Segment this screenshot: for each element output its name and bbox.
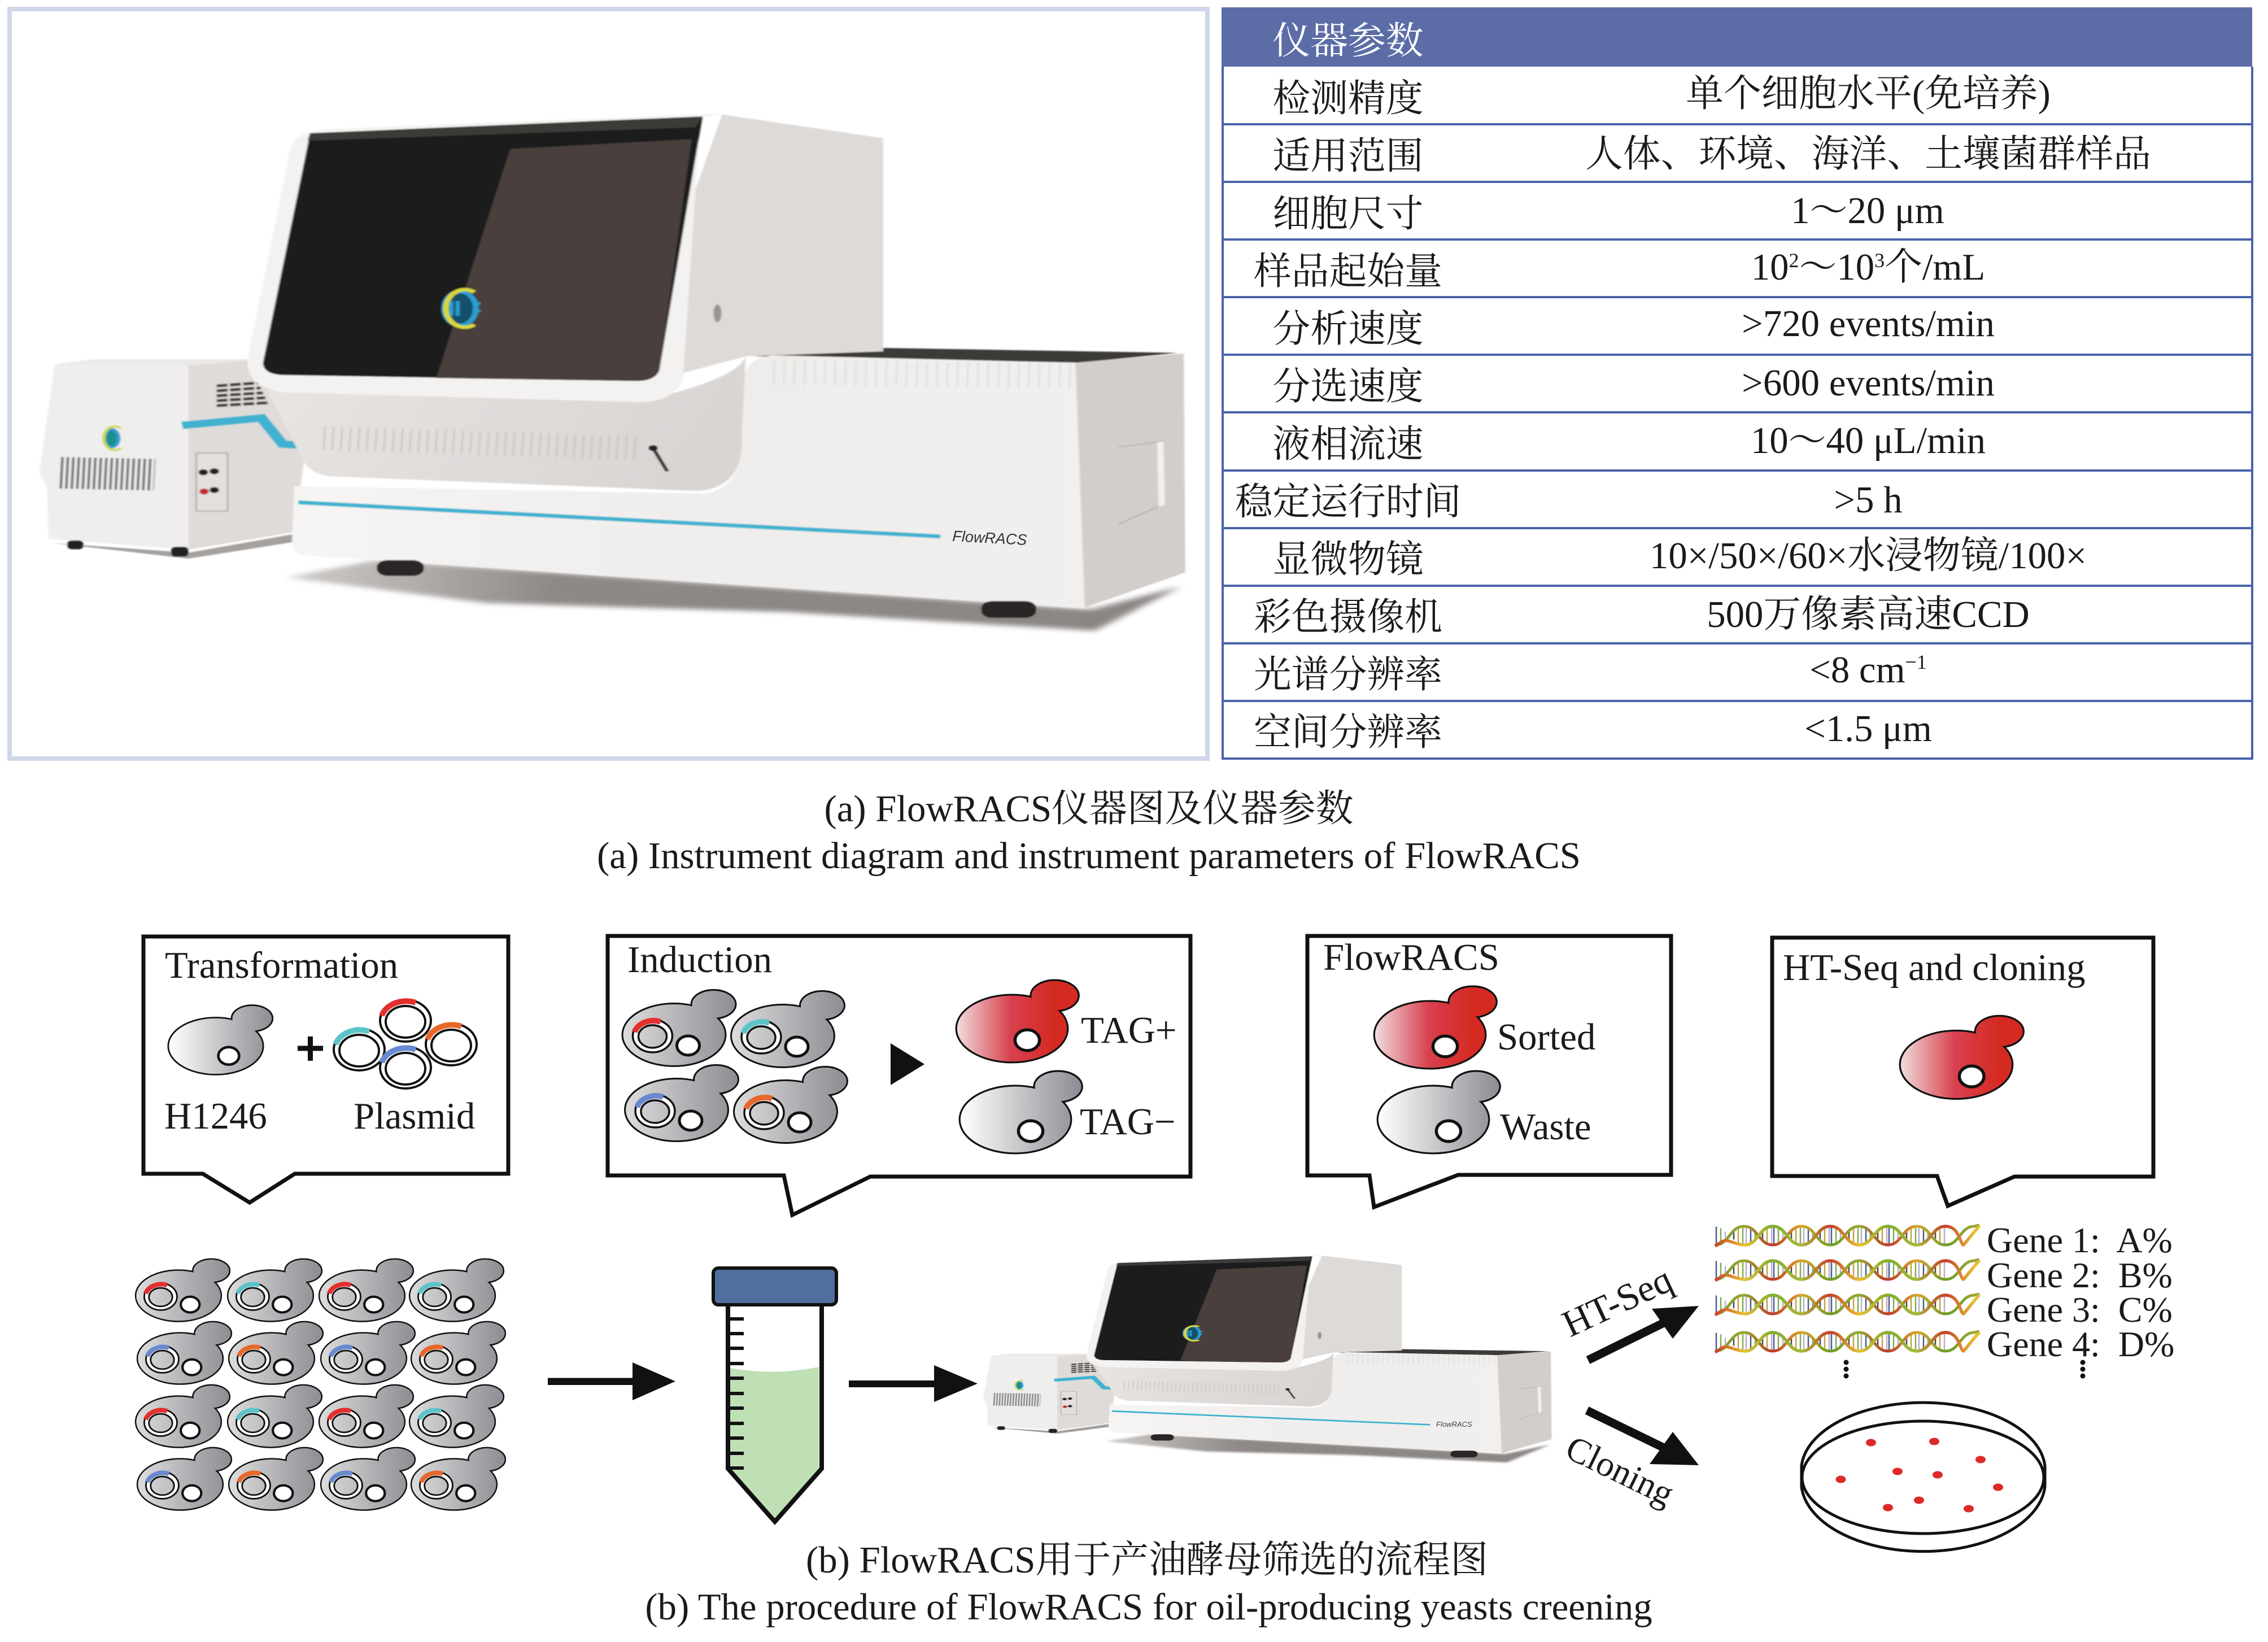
row: sample starting amount: 个/mL bbox=[1885, 246, 1985, 288]
caption b, Chinese: (b) FlowRACS用于产油酵母筛选的流程图 bbox=[806, 1539, 1488, 1581]
row: stable run time bbox=[1235, 479, 1903, 523]
row: sample starting amount: 2 bbox=[1789, 249, 1799, 272]
panel: instrument parameters table bbox=[1222, 7, 2253, 759]
table header bar: 仪器参数 bbox=[1272, 20, 1424, 62]
row: microscope objective: 显微物镜 bbox=[1272, 539, 1424, 581]
row: liquid flow rate bbox=[1272, 420, 1986, 465]
label: Cloning: Cloning bbox=[1560, 1428, 1680, 1514]
label: Waste: Waste bbox=[1500, 1106, 1591, 1148]
icon: sorted red yeast bbox=[1375, 987, 1496, 1068]
row: sample starting amount: ～10 bbox=[1799, 246, 1874, 288]
arrow head: Cloning bbox=[1650, 1432, 1699, 1465]
row: detection precision: 单个细胞水平(免培养) bbox=[1686, 73, 2051, 115]
heading: Transformation: Transformation bbox=[165, 944, 398, 986]
row: analysis speed: 分析速度 bbox=[1272, 308, 1424, 350]
row: spatial resolution: <1.5 μm bbox=[1804, 708, 1932, 750]
row: colour camera bbox=[1254, 594, 2030, 638]
caption a, Chinese: (a) FlowRACS仪器图及仪器参数 bbox=[824, 788, 1354, 830]
icon: grey yeast bbox=[961, 1072, 1081, 1152]
callout: HT-Seq and cloning bbox=[1772, 938, 2153, 1206]
yeast population grid bbox=[136, 1260, 505, 1509]
row: liquid flow rate: 10～40 μL/min bbox=[1751, 420, 1986, 461]
instrument illustration: FlowRACS: FlowRACS bbox=[952, 528, 1027, 548]
table header bar bbox=[1222, 7, 2252, 67]
icon: waste grey yeast bbox=[1379, 1072, 1499, 1152]
icon: four transformed yeasts bbox=[623, 991, 847, 1142]
row: applicable range: 人体、环境、海洋、土壤菌群样品 bbox=[1585, 133, 2151, 175]
row: microscope objective bbox=[1272, 535, 2087, 581]
heading: Induction: Induction bbox=[627, 939, 772, 981]
label: Gene 4: Gene 4: D% bbox=[1987, 1324, 2174, 1364]
row: sample starting amount bbox=[1254, 246, 1985, 293]
DNA helices bbox=[1715, 1225, 1979, 1352]
row: microscope objective: 10×/50×/60×水浸物镜/100× bbox=[1650, 535, 2087, 577]
row: sorting speed: >600 events/min bbox=[1742, 362, 1995, 404]
label: Gene 2: Gene 2: B% bbox=[1987, 1255, 2173, 1295]
row: analysis speed bbox=[1272, 303, 1995, 350]
arrow head: HT-Seq bbox=[1652, 1306, 1699, 1339]
arrow: yeast to tube bbox=[548, 1362, 675, 1400]
row: cell size bbox=[1272, 190, 1944, 235]
instrument illustration: FlowRACS bbox=[40, 114, 1185, 631]
callout: FlowRACS bbox=[1307, 936, 1671, 1207]
ellipsis dots bbox=[1843, 1360, 2085, 1378]
icon: red yeast bbox=[1901, 1017, 2023, 1098]
heading: FlowRACS: FlowRACS bbox=[1323, 937, 1499, 978]
table borders bbox=[1222, 67, 2253, 759]
caption b, English: (b) The procedure of FlowRACS for oil-producing yeasts creening bbox=[645, 1586, 1652, 1628]
row: sample starting amount: 3 bbox=[1874, 249, 1885, 272]
row: sample starting amount: 10 bbox=[1751, 246, 1789, 288]
heading: HT-Seq and cloning: HT-Seq and cloning bbox=[1783, 947, 2086, 988]
row: stable run time: 稳定运行时间 bbox=[1235, 481, 1461, 523]
row: applicable range bbox=[1272, 133, 2151, 177]
label: Sorted: Sorted bbox=[1497, 1016, 1595, 1058]
instrument illustration, small bbox=[983, 1255, 1551, 1462]
icon: host yeast H1246 bbox=[169, 1006, 272, 1074]
arrow: HT-Seq bbox=[1588, 1322, 1666, 1360]
row: analysis speed: >720 events/min bbox=[1742, 303, 1995, 345]
row: applicable range: 适用范围 bbox=[1272, 136, 1424, 177]
row: cell size: 1～20 μm bbox=[1791, 190, 1944, 232]
callout: Induction bbox=[608, 936, 1190, 1215]
icon: triangle arrow bbox=[891, 1043, 924, 1085]
row: stable run time: >5 h bbox=[1834, 479, 1903, 521]
row: detection precision bbox=[1272, 73, 2051, 120]
arrow: tube to instrument bbox=[849, 1365, 978, 1402]
icon: plus bbox=[298, 1036, 323, 1061]
icon: petri dish with colonies bbox=[1802, 1403, 2045, 1552]
label: H1246: H1246 bbox=[164, 1095, 267, 1137]
icon: culture tube bbox=[713, 1268, 836, 1522]
row: sorting speed: 分选速度 bbox=[1272, 366, 1424, 408]
row: spectral resolution: <8 cm bbox=[1809, 649, 1905, 691]
row: spatial resolution: 空间分辨率 bbox=[1254, 712, 1442, 754]
row: spatial resolution bbox=[1254, 708, 1932, 754]
row: sample starting amount: 样品起始量 bbox=[1254, 251, 1442, 293]
label: TAG+: TAG+ bbox=[1081, 1009, 1177, 1051]
row: spectral resolution: 光谱分辨率 bbox=[1254, 654, 1442, 696]
row: spectral resolution: −1 bbox=[1905, 651, 1927, 673]
label: Plasmid: Plasmid bbox=[354, 1095, 475, 1137]
arrow: Cloning bbox=[1587, 1410, 1666, 1449]
row: colour camera: 彩色摄像机 bbox=[1254, 596, 1442, 638]
row: detection precision: 检测精度 bbox=[1272, 78, 1424, 120]
label: Gene 3: Gene 3: C% bbox=[1987, 1290, 2173, 1330]
callout: Transformation bbox=[143, 937, 508, 1203]
row: liquid flow rate: 液相流速 bbox=[1272, 424, 1424, 465]
icon: red yeast bbox=[957, 981, 1078, 1061]
row: sorting speed bbox=[1272, 362, 1995, 408]
label: Gene 1: Gene 1: A% bbox=[1987, 1220, 2173, 1260]
row: colour camera: 500万像素高速CCD bbox=[1707, 594, 2030, 635]
label: TAG−: TAG− bbox=[1080, 1101, 1176, 1143]
caption a, English: (a) Instrument diagram and instrument parameters of FlowRACS bbox=[597, 835, 1581, 877]
icon: plasmids bbox=[334, 1000, 477, 1088]
label: HT-Seq: HT-Seq bbox=[1556, 1258, 1678, 1345]
instrument illustration, small: FlowRACS bbox=[1436, 1420, 1472, 1428]
row: spectral resolution bbox=[1254, 649, 1927, 696]
panel: instrument photo frame bbox=[10, 9, 1207, 759]
row: cell size: 细胞尺寸 bbox=[1272, 193, 1424, 235]
